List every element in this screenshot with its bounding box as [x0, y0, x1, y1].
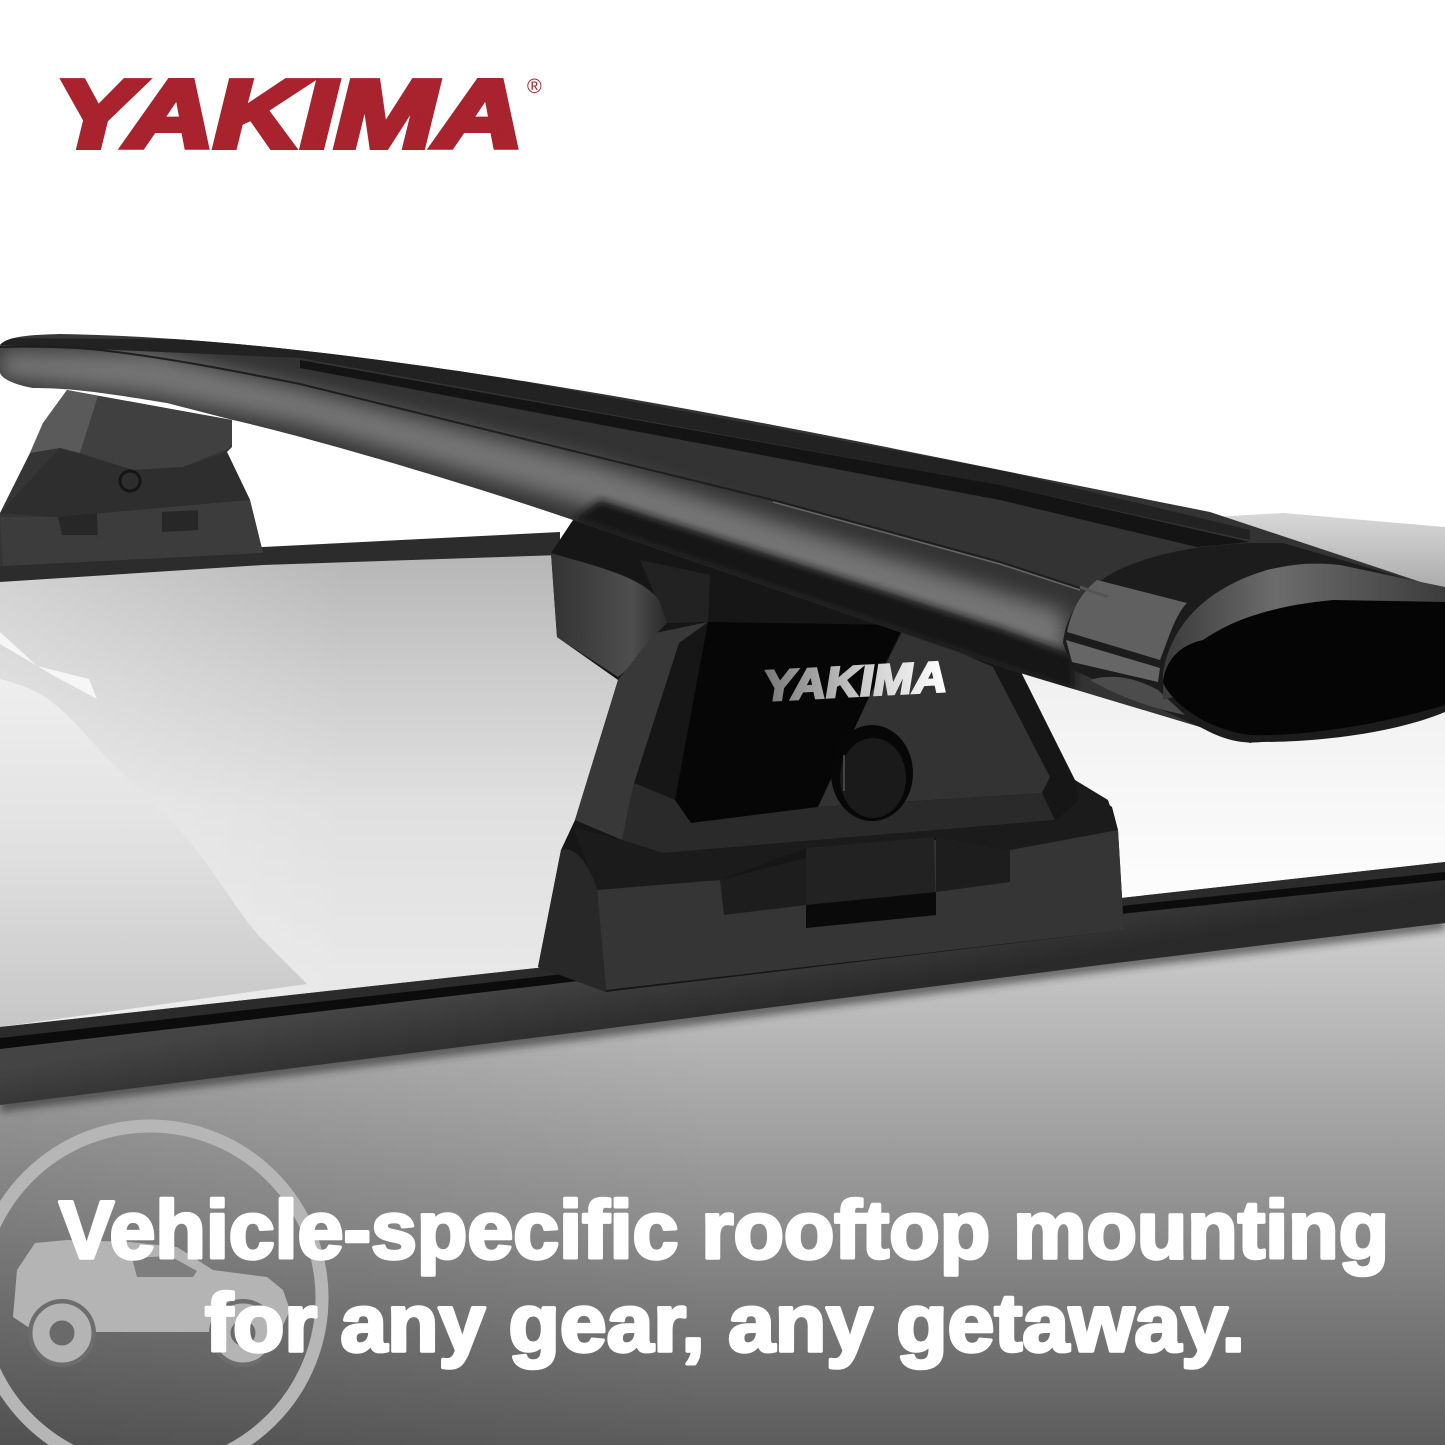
base lower body [597, 830, 1124, 990]
left clip [720, 858, 806, 915]
roof top frame rail [0, 532, 560, 582]
base nose [538, 849, 606, 992]
lower body side shading [0, 1000, 720, 1445]
front wheel arch [209, 1299, 277, 1367]
centre clip [806, 837, 936, 928]
headline: Vehicle-specific rooftop mounting [59, 1185, 1389, 1276]
centre clip shadow [806, 892, 936, 928]
tower wedge [551, 553, 667, 677]
car window [132, 1256, 197, 1277]
logo: Yakima: ® [527, 76, 542, 98]
logo: Yakima: YAKIMA [55, 61, 523, 168]
rail shadow [0, 916, 1445, 1112]
load bar [0, 334, 1445, 743]
front wheel [222, 1312, 264, 1354]
icon: car in circle [0, 1126, 322, 1445]
lower vehicle body [0, 910, 1445, 1445]
tower logo: YAKIMA [762, 653, 948, 711]
tower arm [640, 560, 710, 623]
silver reflection behind bar [1213, 513, 1445, 600]
rear wheel [41, 1312, 83, 1354]
headline: for any gear, any getaway. [205, 1278, 1245, 1369]
tower lower fillet [622, 783, 1055, 853]
tower lock knob [831, 725, 913, 821]
vehicle roof glass [0, 540, 1445, 1027]
bar end cap [1063, 543, 1445, 743]
right clip [936, 837, 1010, 892]
tower black panel [675, 622, 904, 823]
headline [59, 1185, 1389, 1369]
tower side gloss [575, 622, 708, 840]
black roof rail [0, 862, 1445, 1105]
car body [13, 1240, 290, 1332]
front foot tower [538, 520, 1124, 992]
tower grey panel [818, 628, 1050, 807]
rear wheel arch [28, 1299, 96, 1367]
base upper lip [573, 780, 1118, 890]
rear foot mount [0, 390, 263, 566]
